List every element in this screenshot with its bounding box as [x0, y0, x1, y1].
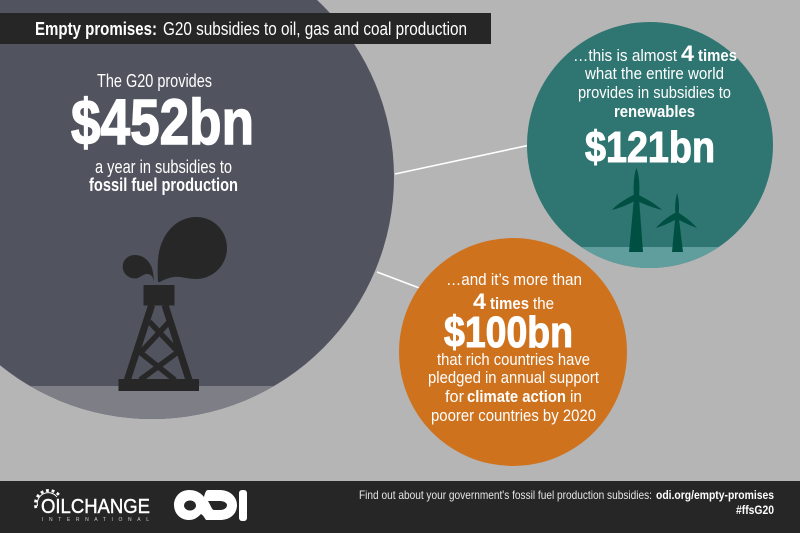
renewables text: renewables — [614, 102, 695, 121]
footer call to action: #ffsG20 — [736, 503, 774, 517]
connector line: to renewables circle — [395, 145, 530, 174]
renewables text: provides in subsidies to — [578, 83, 731, 102]
panel: renewables circle — [520, 22, 780, 277]
climate text top: …and it’s more than — [446, 270, 582, 289]
renewables text: what the entire world — [584, 64, 724, 83]
renewables text: 4 — [681, 41, 695, 66]
footer call to action: Find out about your government's fossil fuel production subsidies: — [359, 488, 652, 502]
figure: $452bn: $452bn — [71, 86, 254, 158]
climate text bottom: climate action — [467, 387, 566, 406]
figure: $121bn: $121bn — [585, 123, 715, 172]
climate text top — [446, 270, 582, 314]
panel: G20 fossil fuel circle — [0, 0, 400, 426]
climate text top: the — [533, 294, 554, 313]
climate text bottom: for — [445, 387, 464, 406]
text: a year in subsidies to: a year in subsidies to — [95, 157, 232, 177]
figure: $100bn: $100bn — [444, 308, 573, 357]
icon: wind turbines — [612, 168, 697, 252]
logo: Oil Change International: INTERNATIONAL — [42, 517, 149, 523]
footer call to action — [359, 488, 774, 517]
climate text bottom: pledged in annual support — [428, 368, 599, 387]
icon: oil derrick gushing — [118, 217, 227, 391]
logo: Oil Change International — [35, 490, 150, 523]
climate text top: 4 — [473, 289, 487, 314]
climate text bottom: that rich countries have — [437, 350, 590, 369]
climate text bottom — [428, 350, 599, 425]
connector line: to climate circle — [377, 272, 422, 289]
climate text bottom: poorer countries by 2020 — [431, 406, 596, 425]
renewables text: …this is almost — [573, 46, 677, 65]
renewables text: times — [698, 46, 737, 65]
footer bar — [0, 481, 800, 533]
header bar — [0, 13, 491, 44]
header bar: G20 subsidies to oil, gas and coal production — [163, 19, 467, 39]
footer call to action: odi.org/empty-promises — [656, 488, 774, 502]
G20 intro text: The G20 provides — [97, 71, 212, 91]
renewables text — [573, 41, 737, 121]
climate text top: times — [490, 294, 529, 313]
logo: Oil Change International: OILCHANGE — [41, 496, 150, 518]
text: fossil fuel production: fossil fuel production — [89, 175, 238, 195]
header bar: Empty promises: — [35, 19, 157, 39]
ground — [582, 247, 718, 268]
panel: climate finance circle — [399, 238, 627, 466]
climate text bottom: in — [570, 387, 582, 406]
ground — [30, 386, 274, 419]
logo: ODI — [174, 490, 247, 521]
